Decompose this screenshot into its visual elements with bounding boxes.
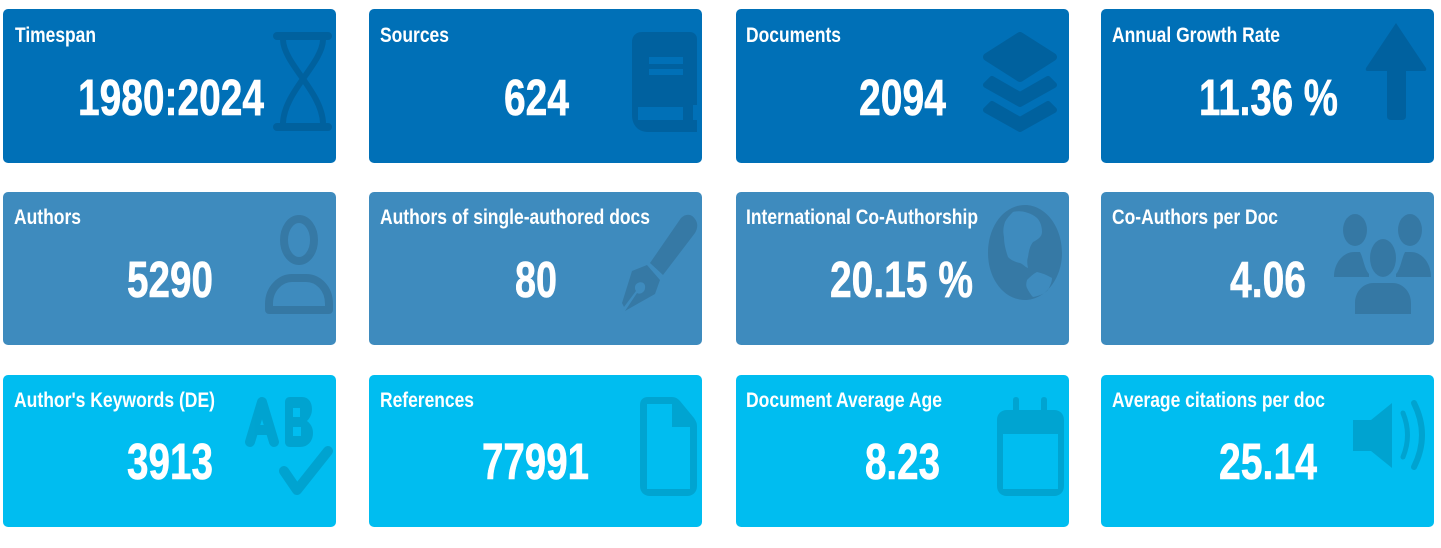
value: 1980:2024 <box>78 69 264 126</box>
icon: layers <box>986 36 1054 129</box>
value: 5290 <box>127 251 213 308</box>
value: 624 <box>504 69 569 126</box>
panel: Author's Keywords (DE) <box>3 375 336 527</box>
panel: Authors <box>3 192 336 345</box>
panel: Authors of single-authored docs <box>369 192 702 345</box>
label: Annual Growth Rate <box>1112 24 1280 47</box>
value: 77991 <box>482 433 589 490</box>
value: 11.36 % <box>1199 69 1338 126</box>
value: 4.06 <box>1230 251 1306 308</box>
panel: Annual Growth Rate <box>1101 9 1434 163</box>
panel: International Co-Authorship <box>736 192 1069 345</box>
icon: spell check <box>250 397 328 490</box>
value: 3913 <box>127 433 213 490</box>
label: Authors <box>14 206 81 229</box>
panel: Document Average Age <box>736 375 1069 527</box>
value: 8.23 <box>865 433 940 490</box>
label: Document Average Age <box>746 389 942 412</box>
value: 80 <box>515 251 557 308</box>
panel: Timespan <box>3 9 336 163</box>
icon: speaker <box>1353 403 1422 468</box>
panel: Co-Authors per Doc <box>1101 192 1434 345</box>
icon: calendar <box>997 397 1064 496</box>
label: Authors of single-authored docs <box>380 206 650 229</box>
icon: book <box>632 32 697 132</box>
panel: Sources <box>369 9 702 163</box>
label: Documents <box>746 24 841 47</box>
label: International Co-Authorship <box>746 206 978 229</box>
label: Author's Keywords (DE) <box>14 389 215 412</box>
value: 20.15 % <box>830 251 973 308</box>
icon: group of people <box>1334 214 1431 314</box>
icon: person <box>269 219 329 310</box>
icon: fountain pen <box>622 215 697 311</box>
icon: up arrow <box>1366 23 1426 120</box>
panel: References <box>369 375 702 527</box>
label: References <box>380 389 474 412</box>
label: Timespan <box>15 24 96 47</box>
panel: Average citations per doc <box>1101 375 1434 527</box>
value: 2094 <box>859 69 946 126</box>
icon: file <box>640 397 697 496</box>
icon: hourglass <box>277 36 328 127</box>
icon: globe <box>988 205 1062 300</box>
label: Co-Authors per Doc <box>1112 206 1278 229</box>
panel: Documents <box>736 9 1069 163</box>
value: 25.14 <box>1219 433 1317 490</box>
label: Sources <box>380 24 449 47</box>
label: Average citations per doc <box>1112 389 1325 412</box>
